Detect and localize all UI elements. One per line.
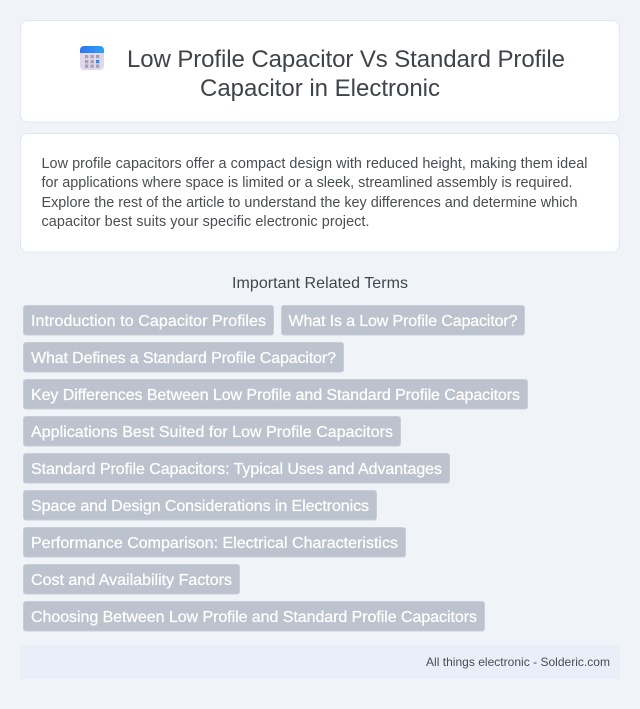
description text: for applications where space is limited or a sleek, streamlined assembly is required.: [42, 175, 572, 191]
tag 5: [24, 416, 400, 446]
description panel: [20, 134, 620, 252]
tag 10: [24, 602, 484, 631]
description text: Low profile capacitors offer a compact design with reduced height, making them ideal: [42, 156, 588, 172]
footer: All things electronic - Solderic.com: [426, 655, 610, 669]
tag list: [24, 306, 528, 631]
title: [127, 46, 565, 102]
tag 2: What Is a Low Profile Capacitor?: [288, 313, 518, 330]
tag 7: Space and Design Considerations in Electronics: [31, 498, 369, 515]
heading: important related terms: Important Related Terms: [232, 275, 408, 292]
tag 4: Key Differences Between Low Profile and Standard Profile Capacitors: [31, 387, 520, 404]
tag 1: Introduction to Capacitor Profiles: [31, 313, 266, 330]
tag 1: [24, 306, 274, 335]
title: Low Profile Capacitor Vs Standard Profile: [127, 46, 565, 73]
tag 5: Applications Best Suited for Low Profile Capacitors: [31, 424, 393, 441]
description text: Explore the rest of the article to understand the key differences and determine which: [42, 195, 578, 211]
tag 2: [282, 306, 524, 335]
tag 9: [24, 564, 240, 594]
tag 3: [24, 342, 344, 372]
title: Capacitor in Electronic: [200, 75, 440, 102]
tag 8: [24, 528, 406, 557]
tag 6: Standard Profile Capacitors: Typical Uses and Advantages: [31, 461, 442, 478]
tag 4: [24, 380, 528, 409]
description text: capacitor best suits your specific electronic project.: [42, 214, 370, 230]
tag 7: [24, 490, 376, 520]
tag 10: Choosing Between Low Profile and Standard Profile Capacitors: [31, 609, 477, 626]
tag 9: Cost and Availability Factors: [31, 572, 232, 589]
tag 8: Performance Comparison: Electrical Characteristics: [31, 535, 398, 552]
footer: [20, 645, 620, 679]
icon: calendar: [80, 46, 104, 70]
tag 3: What Defines a Standard Profile Capacitor?: [31, 350, 336, 367]
header panel: [20, 20, 620, 122]
tag 6: [24, 454, 450, 483]
description text: [42, 156, 588, 230]
